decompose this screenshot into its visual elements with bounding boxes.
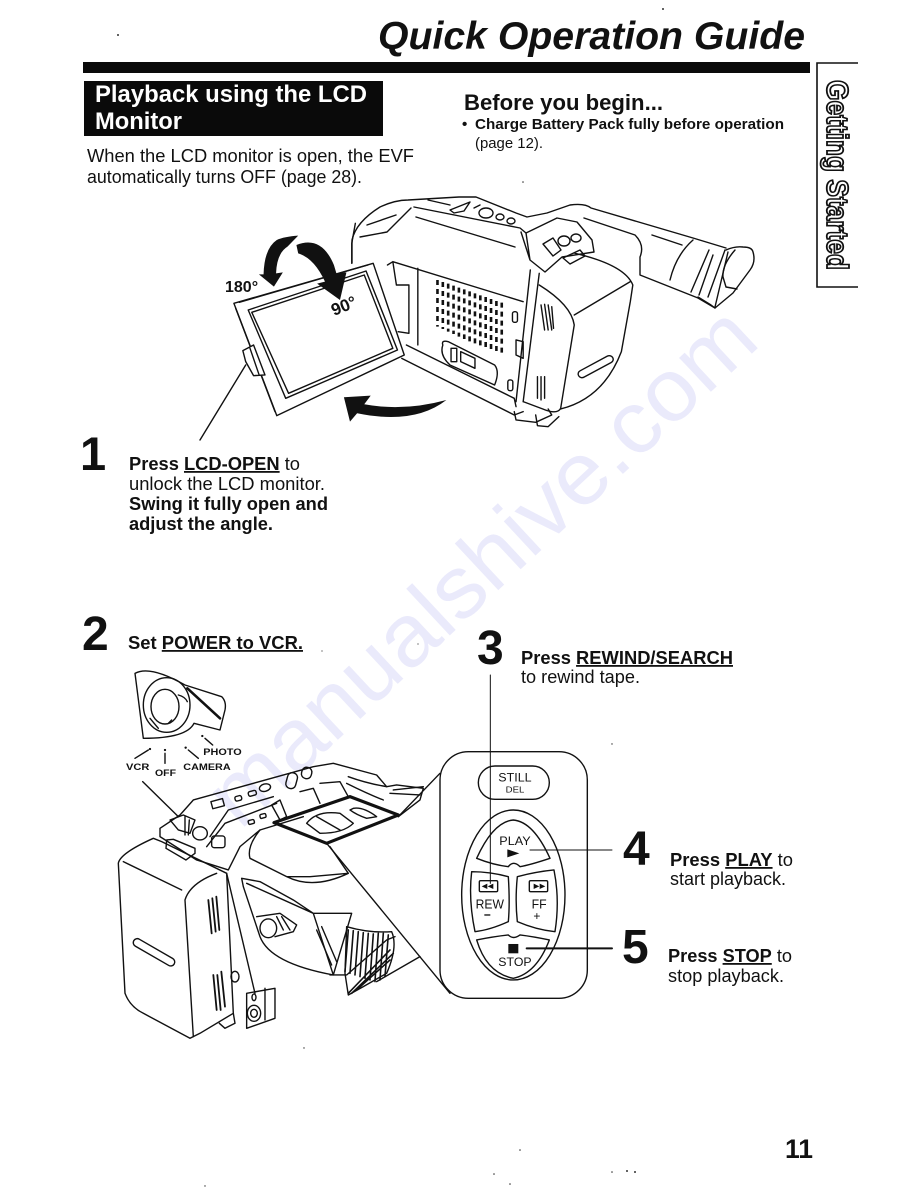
STOP leader line <box>527 947 612 949</box>
step 1: unlock the LCD monitor. <box>129 474 325 494</box>
title: Quick Operation Guide <box>378 15 805 58</box>
step 3: 3 <box>477 622 504 675</box>
arrow: 180 degree rotation <box>259 236 298 287</box>
step 4: start playback. <box>670 869 786 889</box>
step 3 <box>477 622 733 687</box>
power switch position labels <box>126 735 242 778</box>
power switch position labels: VCR <box>126 762 150 772</box>
STILL DEL button <box>478 766 549 799</box>
LCD-OPEN latch <box>243 345 265 376</box>
leader lines <box>490 675 612 883</box>
step 3: to rewind tape. <box>521 667 640 687</box>
intro text: When the LCD monitor is open, the EVF <box>87 146 414 166</box>
highlighted control cluster <box>274 797 398 843</box>
button labels: FF <box>532 897 547 911</box>
icon: LCD speaker grille <box>437 280 502 357</box>
step 5 <box>622 921 792 986</box>
button labels: STILL <box>498 771 532 785</box>
step 2: 2 <box>82 608 109 661</box>
leader line: LCD-OPEN <box>200 365 246 440</box>
step 1: adjust the angle. <box>129 514 273 534</box>
step 1: Swing it fully open and <box>129 494 328 514</box>
step 5: Press STOP to <box>668 946 792 966</box>
before you begin note: Charge Battery Pack fully before operation <box>475 116 784 133</box>
panel outline <box>440 752 587 998</box>
step 4: 4 <box>623 823 650 876</box>
button labels <box>476 771 547 969</box>
step 1: 1 <box>80 427 106 480</box>
FF icon box <box>529 881 548 892</box>
control panel: playback buttons <box>440 675 612 998</box>
button labels: REW <box>476 897 504 911</box>
label: 90 degrees: 90° <box>328 292 360 320</box>
step 4 <box>623 823 793 889</box>
before you begin note: • <box>462 116 467 133</box>
PLAY button <box>477 820 550 867</box>
illustration: power dial and camcorder top view <box>118 671 450 1038</box>
before you begin note <box>462 90 784 152</box>
watermark: manualshive.com <box>185 286 775 845</box>
power switch position labels: OFF <box>155 768 176 778</box>
power switch position labels: PHOTO <box>203 747 242 757</box>
LCD monitor panel <box>234 263 404 416</box>
intro text <box>87 146 414 187</box>
power switch position labels: CAMERA <box>183 762 231 772</box>
title rule <box>83 62 810 73</box>
REW button <box>471 872 509 932</box>
REW icon box <box>479 881 498 892</box>
STOP button <box>477 935 549 978</box>
button labels: DEL <box>506 785 525 795</box>
intro text: automatically turns OFF (page 28). <box>87 167 362 187</box>
step 1: Press LCD-OPEN to <box>129 454 300 474</box>
step 2: Set POWER to VCR. <box>128 633 303 653</box>
button labels: + <box>533 909 540 923</box>
side tab: Getting Started: Getting Started <box>820 80 855 270</box>
page number: 11 <box>785 1134 813 1164</box>
step 1 <box>80 427 328 534</box>
arrow: 90 degree rotation <box>296 242 346 300</box>
step 2 <box>82 608 303 661</box>
icon: eyecup <box>345 927 394 995</box>
step 3: Press REWIND/SEARCH <box>521 648 733 668</box>
camcorder top and viewfinder <box>352 197 754 308</box>
heading: Playback using the LCD Monitor: Playback using the LCD <box>95 81 367 108</box>
heading: Playback using the LCD Monitor: Monitor <box>95 108 182 135</box>
before you begin note: Before you begin... <box>464 90 663 115</box>
arrow: monitor swing open <box>344 396 446 422</box>
before you begin note: (page 12). <box>475 135 543 152</box>
step 5: 5 <box>622 921 649 974</box>
callout lines to control panel <box>327 773 450 993</box>
illustration: camcorder with open LCD monitor <box>200 197 754 440</box>
button labels: STOP <box>498 956 532 969</box>
camcorder body <box>118 763 450 1038</box>
label: 180 degrees: 180° <box>225 279 258 296</box>
heading: Playback using the LCD Monitor <box>84 81 383 136</box>
FF button <box>516 870 557 932</box>
step 4: Press PLAY to <box>670 850 793 870</box>
step 5: stop playback. <box>668 966 784 986</box>
icon: power dial inset <box>135 671 225 817</box>
button labels: PLAY <box>499 835 531 848</box>
outer button oval <box>462 810 565 980</box>
